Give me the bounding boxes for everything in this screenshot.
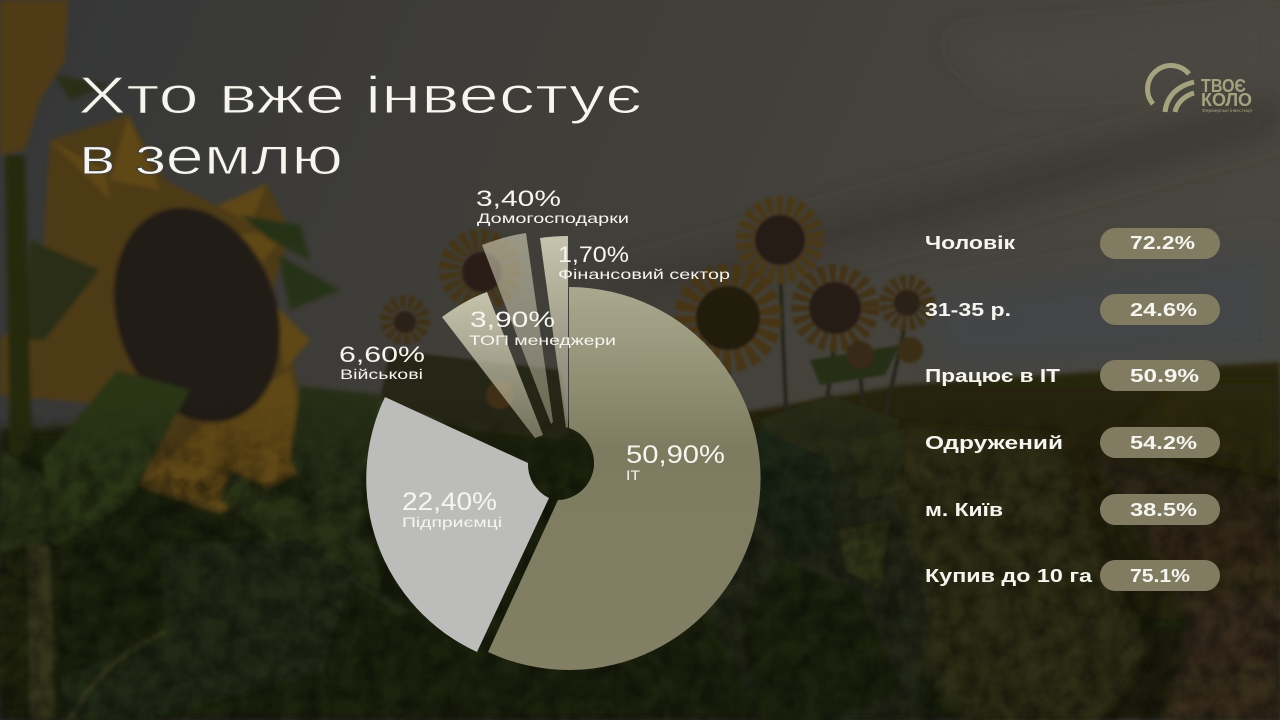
stat: Працює в ІТ: 50.9% [1130, 366, 1199, 386]
stat: 31-35 р.: 31-35 р. [925, 300, 1011, 320]
stat: Купив до 10 га: 75.1% [1130, 566, 1190, 586]
slice: Домогосподарки [482, 233, 553, 424]
slice: Фінансовий сектор [540, 236, 568, 428]
stat: Чоловік: Чоловік [925, 233, 1016, 253]
label: Підприємці [402, 488, 502, 530]
stat: Купив до 10 га: Купив до 10 га [925, 566, 1093, 586]
label: ТОП менеджери: ТОП менеджери [469, 332, 616, 348]
label: IT: IT [626, 467, 640, 483]
stat: Купив до 10 га [925, 560, 1220, 591]
stat: Чоловік: 72.2% [1130, 233, 1195, 253]
slice: ТОП менеджери [442, 292, 543, 438]
stat: м. Київ: м. Київ [925, 500, 1003, 520]
label: ТОП менеджери [469, 307, 616, 348]
stat: Одружений: Одружений [925, 433, 1063, 453]
mid sunflowers [380, 207, 927, 720]
logo wordmark: КОЛО [1201, 90, 1252, 110]
label: Військові: 6,60% [339, 342, 425, 367]
label: Фінансовий сектор: Фінансовий сектор [558, 266, 730, 282]
far field [0, 362, 1280, 720]
big sunflower [0, 0, 460, 720]
investor profile stats [925, 228, 1220, 591]
stat: м. Київ [925, 494, 1220, 525]
label: Фінансовий сектор [558, 242, 730, 282]
title: в землю [79, 128, 343, 186]
stat: 31-35 р.: 24.6% [1130, 300, 1197, 320]
logo wordmark [1201, 76, 1253, 113]
pie chart [366, 233, 761, 670]
label: Фінансовий сектор: 1,70% [558, 242, 629, 267]
slice: IT 50,90% [488, 287, 761, 670]
stat: Працює в ІТ: Працює в ІТ [925, 366, 1060, 386]
icon: circle with field furrows [1148, 66, 1194, 112]
stat: Одружений: 54.2% [1130, 433, 1197, 453]
label: Домогосподарки [476, 186, 629, 226]
logo wordmark: Фермерські інвестиції [1202, 108, 1253, 113]
label: Підприємці: 22,40% [402, 488, 497, 516]
label: Домогосподарки: 3,40% [476, 186, 561, 211]
label: ТОП менеджери: 3,90% [470, 307, 555, 332]
logo wordmark: ТВОЄ [1201, 76, 1246, 96]
stat: Одружений [925, 427, 1220, 458]
stat: Чоловік [925, 228, 1220, 259]
slice: Підприємці 22,40% [366, 397, 549, 652]
label: IT: 50,90% [626, 441, 725, 469]
label: Домогосподарки: Домогосподарки [477, 210, 629, 226]
title: Хто вже інвестує [78, 67, 642, 125]
pie labels [339, 186, 730, 530]
stat: Працює в ІТ [925, 360, 1220, 391]
stat: м. Київ: 38.5% [1130, 500, 1197, 520]
label: IT [626, 441, 725, 483]
label: Підприємці: Підприємці [402, 514, 502, 530]
label: Військові [339, 342, 425, 382]
title [78, 67, 642, 186]
label: Військові: Військові [340, 366, 423, 382]
stat: 31-35 р. [925, 294, 1220, 325]
logo: Твоє Коло [1148, 66, 1253, 113]
